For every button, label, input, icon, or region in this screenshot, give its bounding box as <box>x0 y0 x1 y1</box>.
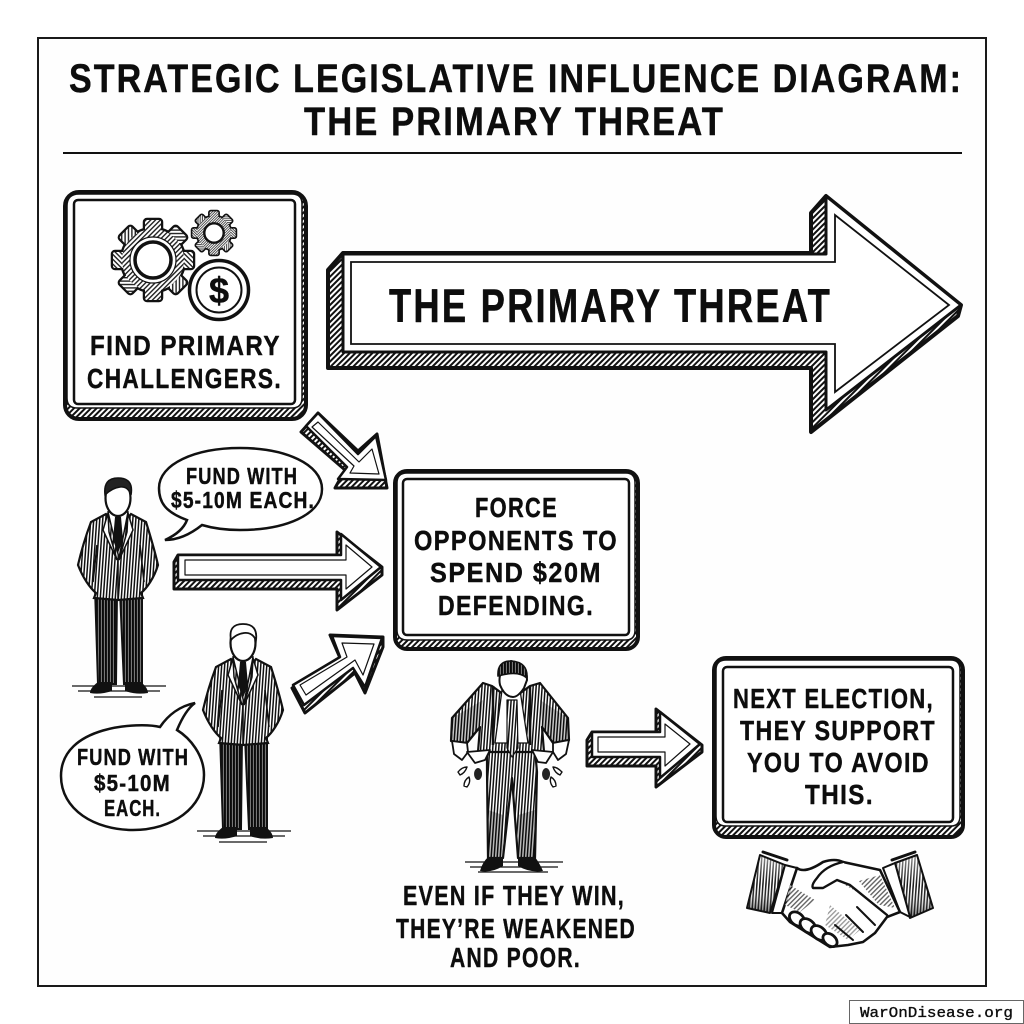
panel: force opponents to spend <box>395 471 638 649</box>
icon: small gear <box>192 211 236 255</box>
arrow: poor man to next election <box>587 709 702 787</box>
watermark <box>850 1000 1024 1024</box>
caption: even if they win: AND POOR. <box>450 942 581 973</box>
arrow: funding to force opponents <box>174 532 382 610</box>
speech bubble: fund with second <box>61 703 204 830</box>
title <box>69 57 963 144</box>
big arrow: the primary threat: THE PRIMARY THREAT <box>389 279 832 332</box>
speech bubble: fund with first: FUND WITH <box>186 463 298 489</box>
caption: even if they win: THEY’RE WEAKENED <box>396 913 636 944</box>
icon: large gear <box>113 220 193 300</box>
panel: next election: YOU TO AVOID <box>747 747 930 778</box>
panel: next election: NEXT ELECTION, <box>733 683 934 714</box>
label: FIND PRIMARY <box>90 330 281 361</box>
caption: even if they win: EVEN IF THEY WIN, <box>403 880 625 911</box>
arrow: challengers to force opponents <box>301 413 387 488</box>
icon: dollar coin <box>190 260 248 320</box>
panel: force opponents to spend: DEFENDING. <box>438 590 594 621</box>
panel: force opponents to spend: FORCE <box>475 492 558 523</box>
big arrow: the primary threat <box>328 196 961 432</box>
label: CHALLENGERS. <box>87 363 282 394</box>
figure: first man in suit <box>72 478 166 697</box>
caption: even if they win <box>396 880 636 973</box>
title: THE PRIMARY THREAT <box>304 100 725 144</box>
icon: dollar coin: $ <box>209 270 229 311</box>
speech bubble: fund with second: EACH. <box>104 795 161 821</box>
panel: next election: THEY SUPPORT <box>740 715 936 746</box>
icon: handshake <box>747 852 933 949</box>
figure: second man in suit <box>197 624 291 842</box>
speech bubble: fund with second: FUND WITH <box>77 744 189 770</box>
panel: find primary challengers <box>65 192 306 419</box>
speech bubble: fund with first: $5-10M EACH. <box>171 487 315 513</box>
panel: force opponents to spend: OPPONENTS TO <box>414 525 618 556</box>
watermark: WarOnDisease.org <box>860 1005 1013 1022</box>
label <box>87 330 282 394</box>
panel: force opponents to spend: SPEND $20M <box>430 557 602 588</box>
speech bubble: fund with second: $5-10M <box>94 770 171 796</box>
panel: next election <box>714 658 963 837</box>
panel: next election: THIS. <box>805 779 874 810</box>
figure: poor man with empty pockets <box>451 661 569 872</box>
arrow: second funding to force opponents <box>292 635 383 713</box>
speech bubble: fund with first <box>159 448 322 540</box>
